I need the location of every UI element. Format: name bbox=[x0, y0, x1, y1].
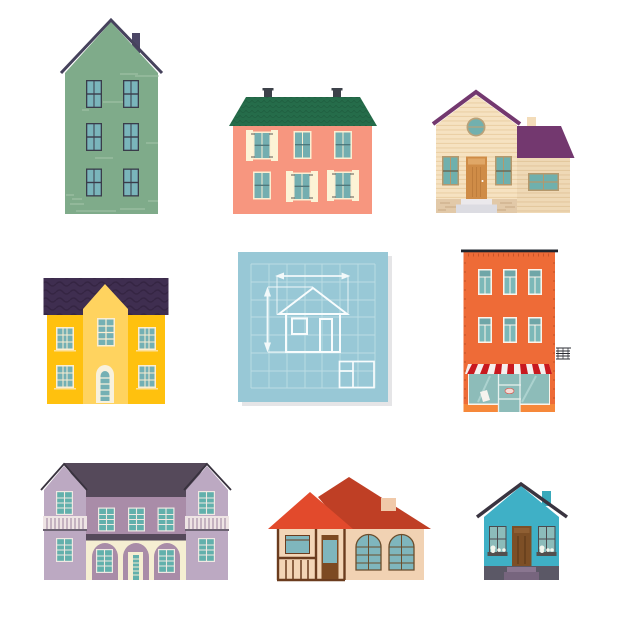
house: tall green bbox=[61, 20, 162, 214]
windows bbox=[86, 80, 139, 196]
roof bbox=[61, 20, 162, 73]
paper shadow bbox=[242, 256, 392, 406]
balcony bbox=[556, 348, 571, 359]
stone base bbox=[436, 199, 517, 213]
poster bbox=[480, 390, 490, 402]
house: pink with green roof bbox=[229, 88, 377, 214]
central gable bbox=[83, 284, 128, 404]
window bbox=[285, 535, 310, 554]
door sign bbox=[505, 388, 514, 394]
side windows bbox=[442, 156, 512, 186]
blueprint bbox=[238, 252, 392, 406]
back roof bbox=[318, 477, 431, 529]
building: orange shop bbox=[461, 250, 571, 412]
stone base bbox=[484, 566, 559, 580]
annex roof bbox=[517, 126, 574, 158]
windows bbox=[489, 526, 556, 553]
timber frame bbox=[277, 529, 345, 580]
paper bbox=[238, 252, 388, 402]
house: yellow bbox=[44, 278, 168, 404]
central upper wall bbox=[86, 497, 186, 535]
house: red roof bungalow bbox=[268, 477, 431, 580]
gable roofs bbox=[41, 464, 231, 490]
annex window bbox=[528, 173, 559, 191]
arched door bbox=[96, 365, 114, 403]
door bbox=[512, 526, 532, 566]
cornice bbox=[461, 250, 558, 252]
roof bbox=[44, 278, 168, 315]
chimney bbox=[542, 491, 551, 506]
walls bbox=[484, 486, 559, 566]
house: lilac villa bbox=[41, 463, 231, 580]
porch roof bbox=[86, 534, 186, 540]
shop front bbox=[464, 374, 555, 412]
dimension arrows bbox=[265, 273, 349, 352]
brick marks bbox=[66, 74, 159, 211]
round window bbox=[466, 118, 486, 136]
house: cream with purple roof bbox=[433, 92, 574, 213]
house: small blue bbox=[477, 484, 567, 580]
door bbox=[322, 535, 338, 579]
floor plan bbox=[340, 362, 374, 388]
ground floor bbox=[86, 540, 186, 580]
roof bbox=[229, 97, 377, 126]
steps bbox=[456, 199, 497, 213]
walls bbox=[65, 22, 158, 214]
walls bbox=[233, 126, 372, 214]
balconies bbox=[43, 516, 229, 531]
shop door bbox=[498, 374, 521, 412]
brick detail bbox=[468, 254, 552, 256]
front roof bbox=[268, 492, 353, 529]
right wing bbox=[186, 466, 228, 580]
chimney bbox=[132, 33, 140, 53]
walls bbox=[345, 529, 424, 580]
door bbox=[466, 156, 487, 200]
arched windows bbox=[356, 534, 414, 570]
main walls bbox=[436, 95, 517, 213]
chimney bbox=[381, 498, 396, 511]
flower boxes bbox=[488, 546, 556, 556]
windows bbox=[56, 491, 215, 573]
house outline bbox=[279, 288, 347, 352]
central roof bbox=[64, 463, 207, 497]
windows bbox=[478, 269, 542, 343]
annex walls bbox=[517, 158, 570, 213]
steps bbox=[504, 567, 539, 580]
walls bbox=[47, 315, 165, 404]
windows bbox=[54, 318, 158, 390]
left wing bbox=[44, 466, 86, 580]
awning bbox=[465, 364, 552, 374]
chimneys bbox=[262, 88, 342, 98]
windows bbox=[246, 130, 359, 202]
roof bbox=[477, 484, 567, 517]
chimney bbox=[527, 117, 536, 127]
main roof bbox=[433, 92, 520, 124]
grid bbox=[251, 264, 375, 388]
walls bbox=[464, 252, 555, 412]
